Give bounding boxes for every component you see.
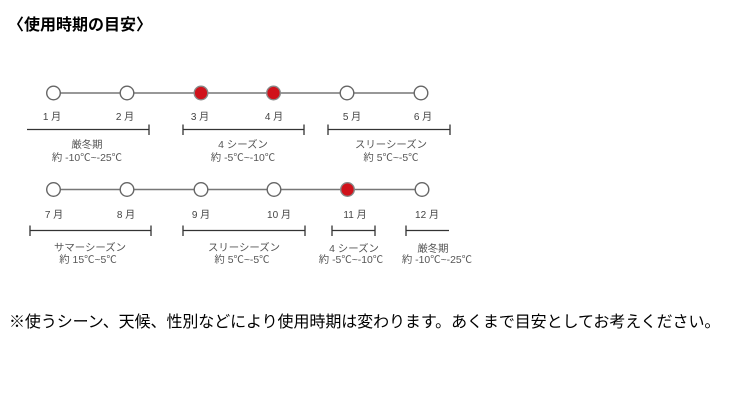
season: summer season, July to August: 約 15℃~5℃ xyxy=(59,253,117,266)
season: three seasons, September to October xyxy=(183,226,305,266)
season: four seasons, November xyxy=(319,226,383,266)
season: four seasons, March to April xyxy=(183,124,304,164)
season: severe winter, January to February: 約 -10℃~-25℃ xyxy=(52,151,122,164)
title: 〈使用時期の目安〉 xyxy=(8,17,152,34)
row 1: January to June timeline: 4 月 xyxy=(265,111,283,123)
row 2: July to December timeline: 10 月 xyxy=(267,209,291,221)
season: four seasons, March to April: 約 -5℃~-10℃ xyxy=(211,151,275,164)
row 2: July to December timeline: 7 月 xyxy=(45,209,63,221)
season: severe winter, December: 約 -10℃~-25℃ xyxy=(402,253,472,266)
row 2: July to December timeline: 12 月 xyxy=(415,209,439,221)
row 1: January to June timeline xyxy=(43,86,432,123)
season: three seasons, September to October: 約 5℃~-5℃ xyxy=(214,253,270,266)
season: summer season, July to August xyxy=(30,226,151,266)
season: four seasons, November: 4 シーズン xyxy=(329,242,379,255)
row 1: January to June timeline: 2 月 xyxy=(116,111,134,123)
season: three seasons, September to October: スリーシーズン xyxy=(208,241,280,254)
footnote: ※使うシーン、天候、性別などにより使用時期は変わります。あくまで目安としてお考えください。 xyxy=(9,314,720,331)
season: four seasons, November: 約 -5℃~-10℃ xyxy=(319,253,383,266)
row 2: July to December timeline: 9 月 xyxy=(192,209,210,221)
season: severe winter, December xyxy=(402,226,472,266)
season: three seasons, May to June: 約 5℃~-5℃ xyxy=(363,151,419,164)
row 1: January to June timeline: 3 月 xyxy=(191,111,209,123)
season: four seasons, March to April: 4 シーズン xyxy=(218,138,268,151)
row 2: July to December timeline: 8 月 xyxy=(117,209,135,221)
season: three seasons, May to June: スリーシーズン xyxy=(355,138,427,151)
season: severe winter, January to February: 厳冬期 xyxy=(71,138,103,151)
row 1: January to June timeline: 1 月 xyxy=(43,111,61,123)
row 1: January to June timeline: 5 月 xyxy=(343,111,361,123)
row 2: July to December timeline xyxy=(45,183,439,221)
season: summer season, July to August: サマーシーズン xyxy=(54,241,126,254)
season: three seasons, May to June xyxy=(328,124,450,164)
row 2: July to December timeline: 11 月 xyxy=(343,209,367,221)
row 1: January to June timeline: 6 月 xyxy=(414,111,432,123)
season: severe winter, December: 厳冬期 xyxy=(417,242,449,255)
season: severe winter, January to February xyxy=(27,124,149,164)
